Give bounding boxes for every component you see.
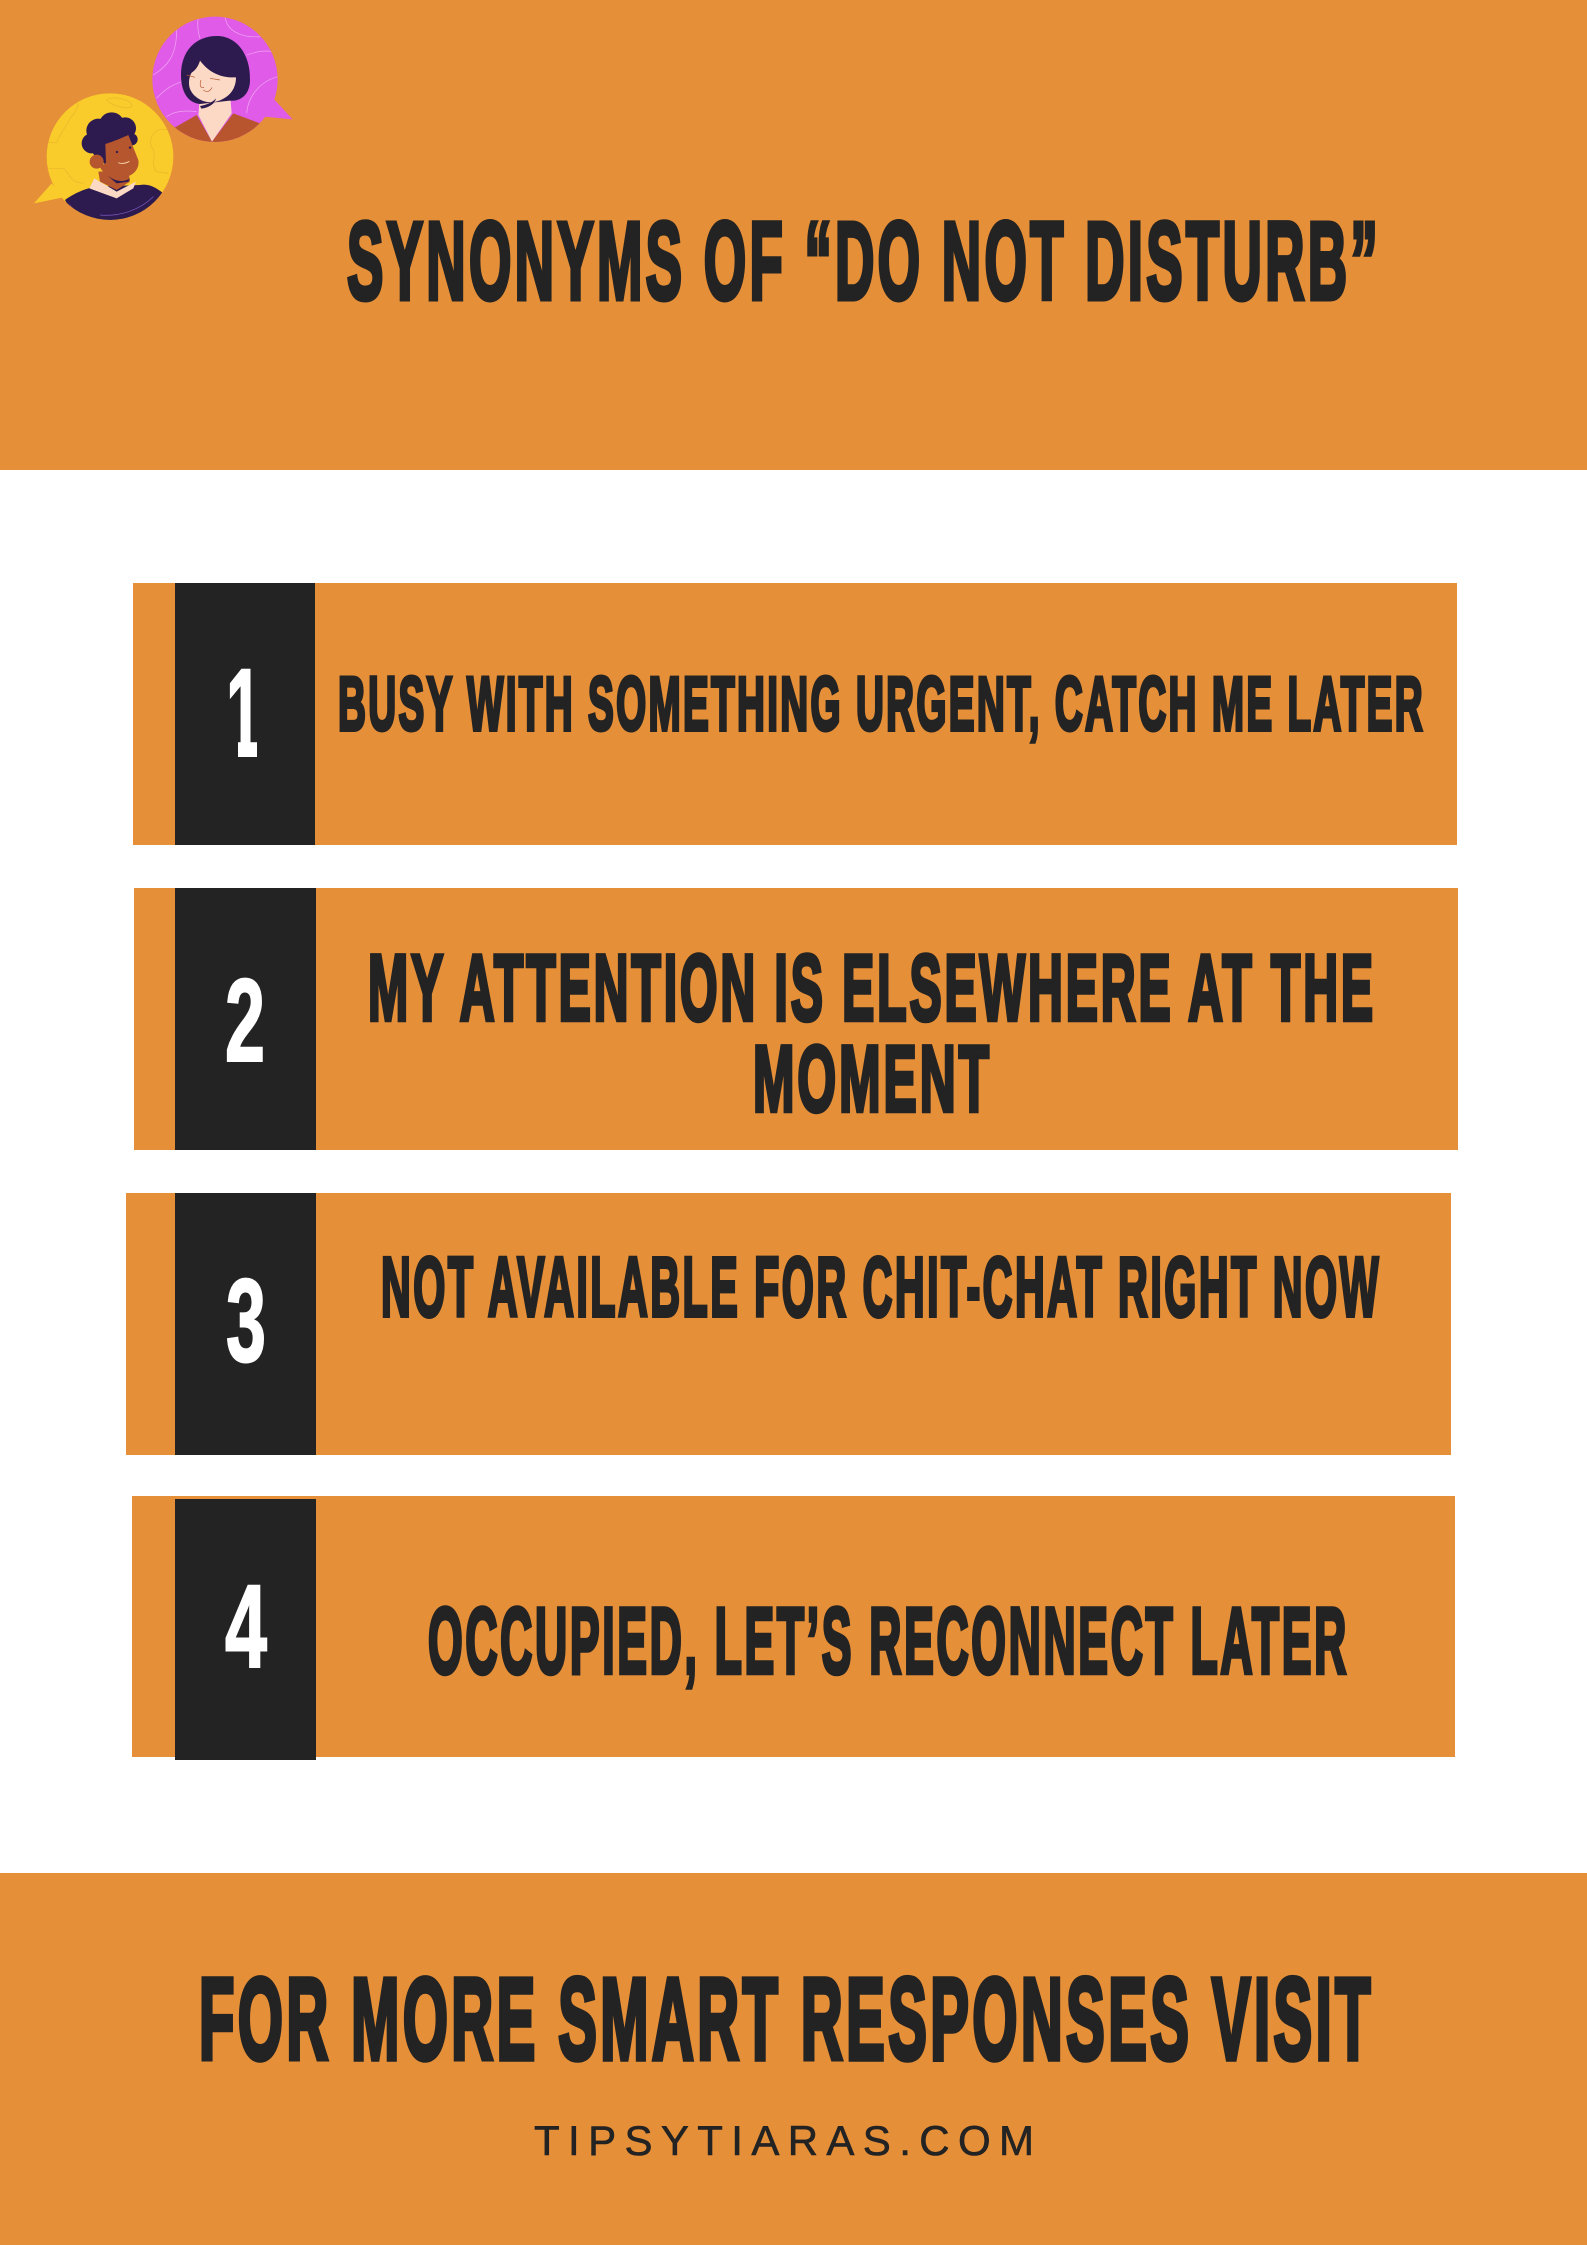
header banner — [0, 0, 1587, 470]
item 2 orange bar — [134, 888, 1458, 1150]
panel: item 4 — [132, 1496, 1455, 1760]
item 2 number block — [175, 888, 316, 1150]
item 3 number: 3 — [226, 1255, 266, 1387]
panel: item 1 — [133, 583, 1457, 845]
item 4 orange bar — [132, 1496, 1455, 1757]
footer website: TIPSYTIARAS.COM — [534, 2117, 1034, 2164]
item 2 number: 2 — [225, 955, 265, 1087]
item 4 number: 4 — [225, 1561, 267, 1693]
footer banner — [0, 1873, 1587, 2245]
item 1 number block — [175, 583, 315, 845]
panel: item 3 — [126, 1193, 1451, 1455]
item 4 number block — [175, 1499, 316, 1760]
icon: two chat bubble avatars — [34, 17, 293, 227]
icon: man in yellow speech bubble — [34, 93, 173, 227]
icon: woman in pink speech bubble — [152, 17, 293, 147]
item 2 text: MOMENT — [753, 1026, 992, 1131]
item 3 number block — [175, 1193, 316, 1455]
item 2 text — [368, 935, 1376, 1131]
item 1 number: 1 — [226, 644, 262, 783]
panel: item 2 — [134, 888, 1458, 1150]
item 3 orange bar — [126, 1193, 1451, 1455]
item 1 orange bar — [133, 583, 1457, 845]
